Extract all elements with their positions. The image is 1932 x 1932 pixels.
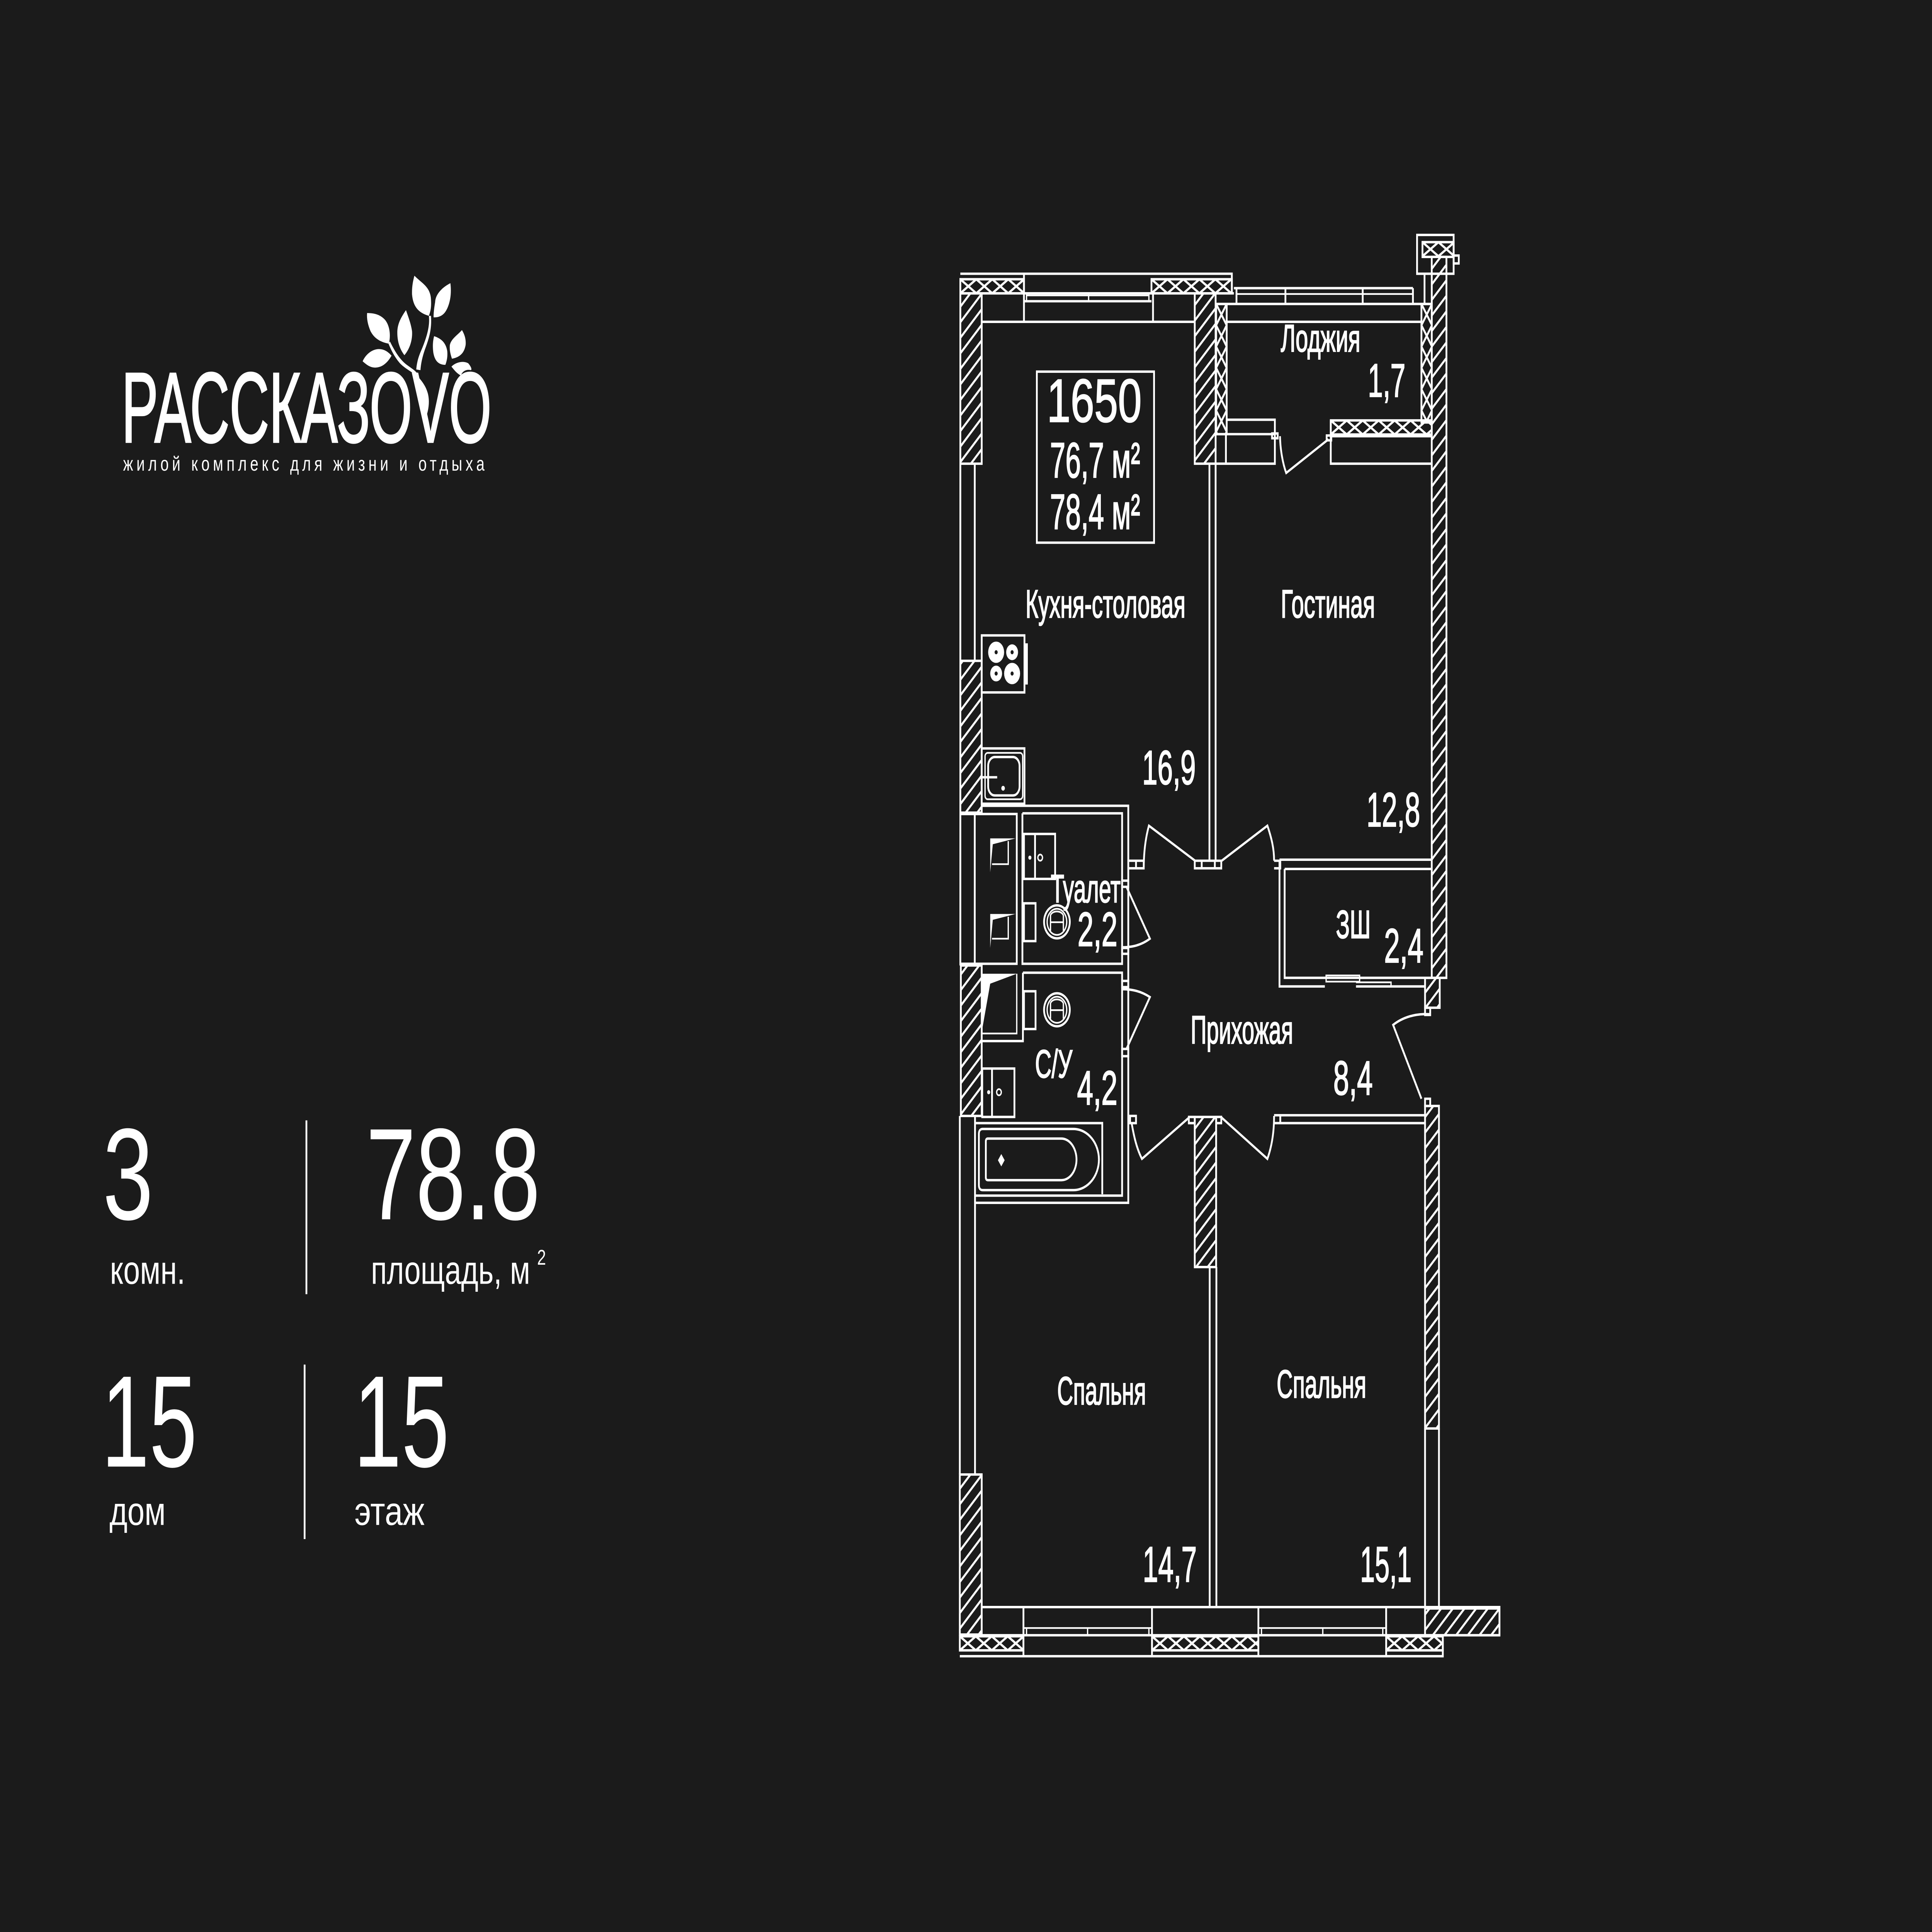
label: kitchen-dining: 16,9 <box>1142 741 1196 794</box>
label: toilet: Туалет <box>1051 867 1121 911</box>
label: wardrobe <box>1336 903 1423 973</box>
label: wardrobe: 2,4 <box>1384 919 1423 973</box>
built-in wardrobe <box>1279 860 1432 986</box>
logo wordmark: РАССКАЗОVО <box>122 352 492 463</box>
door: bathroom <box>1122 981 1150 1056</box>
label: hallway <box>1190 1008 1373 1105</box>
door: living room <box>1221 826 1280 868</box>
icon: utility shaft upper <box>990 838 1015 872</box>
logo mark: branch with leaves <box>363 276 471 420</box>
stat: floor <box>354 1349 449 1534</box>
apartment info box <box>1037 366 1154 543</box>
ventilation shaft on roof line <box>1417 235 1459 304</box>
icon: bathroom shaft <box>982 974 1017 1034</box>
icon: utility shaft lower <box>990 914 1015 948</box>
floor value: 15 <box>354 1349 449 1495</box>
insulated facade bands <box>960 274 1443 1650</box>
area label: площадь, м <box>371 1248 530 1293</box>
door: toilet room <box>1122 881 1150 954</box>
label: right bedroom <box>1277 1362 1412 1593</box>
label: bathroom <box>1035 1042 1117 1115</box>
label: loggia <box>1281 316 1405 407</box>
label: toilet: 2,2 <box>1078 903 1117 956</box>
floor label: этаж <box>354 1490 425 1534</box>
icon: bathroom basin <box>982 1068 1014 1117</box>
label: toilet <box>1051 867 1121 956</box>
icon: kitchen stove <box>982 635 1028 692</box>
toilet room walls <box>975 806 1128 1203</box>
building label: дом <box>109 1490 166 1534</box>
label: bathroom: С/У <box>1035 1042 1073 1086</box>
label: left bedroom: Спальня <box>1057 1369 1146 1413</box>
door: entrance <box>1393 1008 1430 1106</box>
total area: 78,4 м² <box>1050 484 1140 540</box>
area unit superscript: 2 <box>537 1246 546 1269</box>
door: lower right bedroom <box>1216 1116 1274 1159</box>
area value: 78.8 <box>366 1102 540 1247</box>
partition pier between kitchen and living room <box>1195 861 1221 868</box>
label: living room: 12,8 <box>1367 783 1420 837</box>
label: hallway: 8,4 <box>1333 1051 1373 1105</box>
label: wardrobe: ЗШ <box>1336 903 1371 947</box>
icon: toilet room WC <box>1024 903 1070 941</box>
label: loggia: 1,7 <box>1368 354 1405 407</box>
label: hallway: Прихожая <box>1190 1008 1293 1052</box>
hall lower wall <box>1274 1115 1425 1123</box>
icon: bathroom WC <box>1024 991 1070 1029</box>
label: living room: Гостиная <box>1281 582 1375 626</box>
label: left bedroom <box>1057 1369 1197 1593</box>
label: right bedroom: Спальня <box>1277 1362 1366 1406</box>
label: living room <box>1281 582 1420 837</box>
rooms label: комн. <box>110 1248 185 1293</box>
icon: kitchen sink <box>982 748 1024 804</box>
windows <box>1024 274 1386 1656</box>
living area: 76,7 м² <box>1050 433 1140 488</box>
rooms value: 3 <box>103 1102 153 1247</box>
divider: rooms and area <box>306 1121 307 1294</box>
stat: area <box>366 1102 546 1293</box>
room labels <box>1026 316 1423 1593</box>
exterior and structural walls <box>960 257 1500 1656</box>
label: bathroom: 4,2 <box>1077 1061 1117 1115</box>
logo <box>122 276 492 475</box>
label: loggia: Лоджия <box>1281 316 1361 360</box>
apartment number: 1650 <box>1047 366 1142 435</box>
logo tagline: жилой комплекс для жизни и отдыха <box>123 452 485 475</box>
label: kitchen-dining <box>1026 582 1196 794</box>
building value: 15 <box>102 1349 197 1495</box>
floor plan <box>960 235 1500 1656</box>
stat: rooms <box>103 1102 185 1293</box>
loggia enclosure <box>1216 288 1432 473</box>
icon: bathtub <box>975 1123 1102 1194</box>
stat: building <box>102 1349 197 1534</box>
label: kitchen-dining: Кухня-столовая <box>1026 582 1185 626</box>
label: left bedroom: 14,7 <box>1143 1537 1197 1593</box>
label: right bedroom: 15,1 <box>1360 1537 1412 1593</box>
door: kitchen <box>1128 826 1196 868</box>
divider: building and floor <box>304 1365 306 1539</box>
icon: toilet room basin <box>1024 834 1055 879</box>
door: lower left bedroom <box>1130 1116 1195 1159</box>
